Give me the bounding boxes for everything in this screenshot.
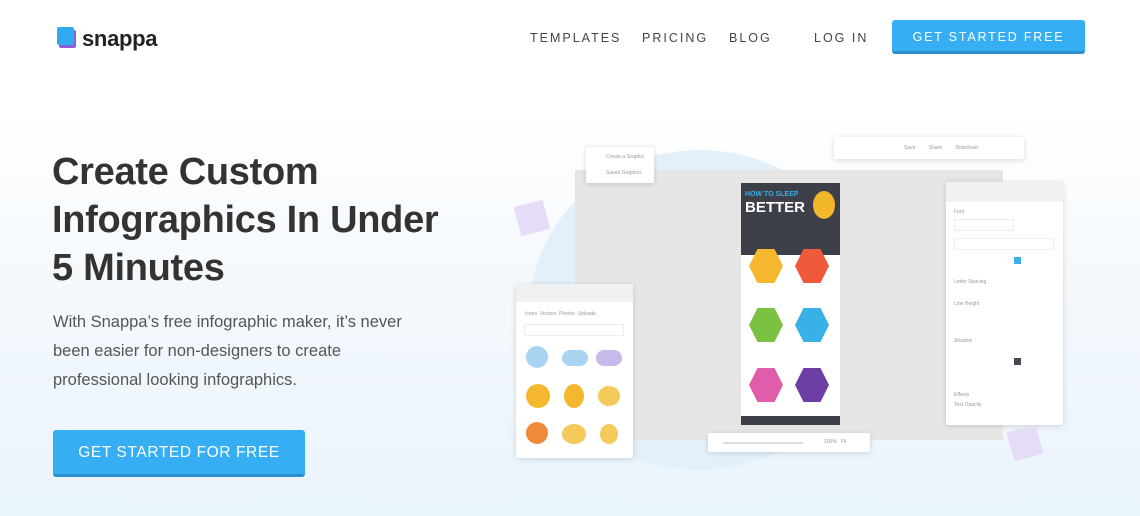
infographic: BETTER [745, 199, 805, 216]
right text panel: Line Height [954, 301, 979, 307]
create graphic menu [586, 147, 654, 183]
nav: templates: TEMPLATES [530, 31, 621, 45]
zoom bar [708, 433, 870, 452]
right text panel: Text Opacity [954, 402, 982, 408]
top toolbar: Save Share Download [904, 145, 978, 151]
nav: pricing: PRICING [642, 31, 708, 45]
right text panel: Letter Spacing [954, 279, 986, 285]
create graphic menu: Saved Graphics [606, 170, 642, 176]
right text panel [946, 182, 1063, 425]
infographic: HOW TO SLEEP [745, 191, 799, 198]
canvas area [575, 170, 1003, 440]
title: Create Custom Infographics In Under 5 Minutes [52, 151, 438, 289]
logo: snappa [82, 26, 157, 51]
CTA button: GET STARTED FOR FREE [78, 444, 280, 461]
description: With Snappa’s free infographic maker, it’s never been easier for non-designers to create professional looking infographics. [53, 313, 402, 389]
right text panel: Font [954, 209, 964, 215]
infographic [741, 183, 840, 425]
header button: GET STARTED FREE [913, 30, 1064, 44]
right text panel: Effects [954, 392, 969, 398]
zoom bar: 100% Fit [824, 439, 847, 445]
create graphic menu: Create a Graphic [606, 154, 644, 160]
decorative squares [514, 200, 550, 236]
top toolbar [834, 137, 1024, 159]
left icons panel [516, 284, 633, 458]
nav: blog: BLOG [729, 31, 772, 45]
nav: log in: LOG IN [814, 31, 868, 45]
header button [892, 20, 1085, 54]
left icons panel: Icons Vectors Photos Uploads [525, 311, 596, 317]
CTA button [53, 430, 305, 477]
right text panel: Shadow [954, 338, 972, 344]
editor mockup [514, 136, 1065, 470]
